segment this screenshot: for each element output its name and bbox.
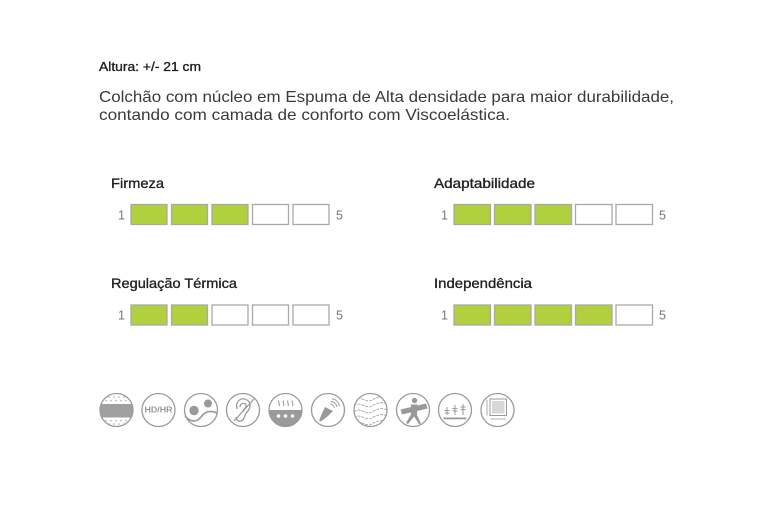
description text [99, 89, 674, 124]
description text: contando com camada de conforto com Viscoelástica. [99, 107, 510, 124]
icon: HD/HR [142, 394, 175, 426]
rating: Adaptabilidade [434, 175, 666, 224]
rating: Firmeza: 1 [118, 208, 125, 222]
rating: Independência [434, 275, 666, 325]
icon: person carrying rolled mattress [396, 394, 430, 426]
rating: Adaptabilidade: Adaptabilidade [434, 175, 535, 191]
rating: Independência: Independência [434, 275, 532, 291]
icon: mattress dimensions [481, 394, 514, 426]
icon row [99, 394, 514, 428]
icon: wavy texture [354, 394, 388, 426]
rating: Adaptabilidade: 1 [441, 208, 448, 222]
rating: Independência: 5 [659, 308, 666, 322]
rating: Regulação Térmica: Regulação Térmica [111, 275, 237, 291]
icon: heat regulation [268, 394, 303, 428]
description text: Colchão com núcleo em Espuma de Alta densidade para maior durabilidade, [99, 89, 674, 106]
icon: pressure spheres [184, 394, 218, 426]
rating: Firmeza: Firmeza [111, 175, 164, 191]
rating: Firmeza: 5 [336, 208, 343, 222]
rating: Independência: 1 [441, 308, 448, 322]
rating: Regulação Térmica: 5 [336, 308, 343, 322]
icon: silent, crossed ear [226, 394, 260, 426]
icon: ultrasound device [312, 394, 344, 426]
height label: Altura: +/- 21 cm [99, 59, 201, 74]
icon: HD/HR: HD/HR [144, 406, 173, 414]
icon: springs on base [438, 394, 472, 426]
rating: Firmeza [111, 175, 343, 224]
icon: foam layers [99, 394, 134, 426]
rating: Regulação Térmica [111, 275, 343, 325]
rating: Regulação Térmica: 1 [118, 308, 125, 322]
rating: Adaptabilidade: 5 [659, 208, 666, 222]
